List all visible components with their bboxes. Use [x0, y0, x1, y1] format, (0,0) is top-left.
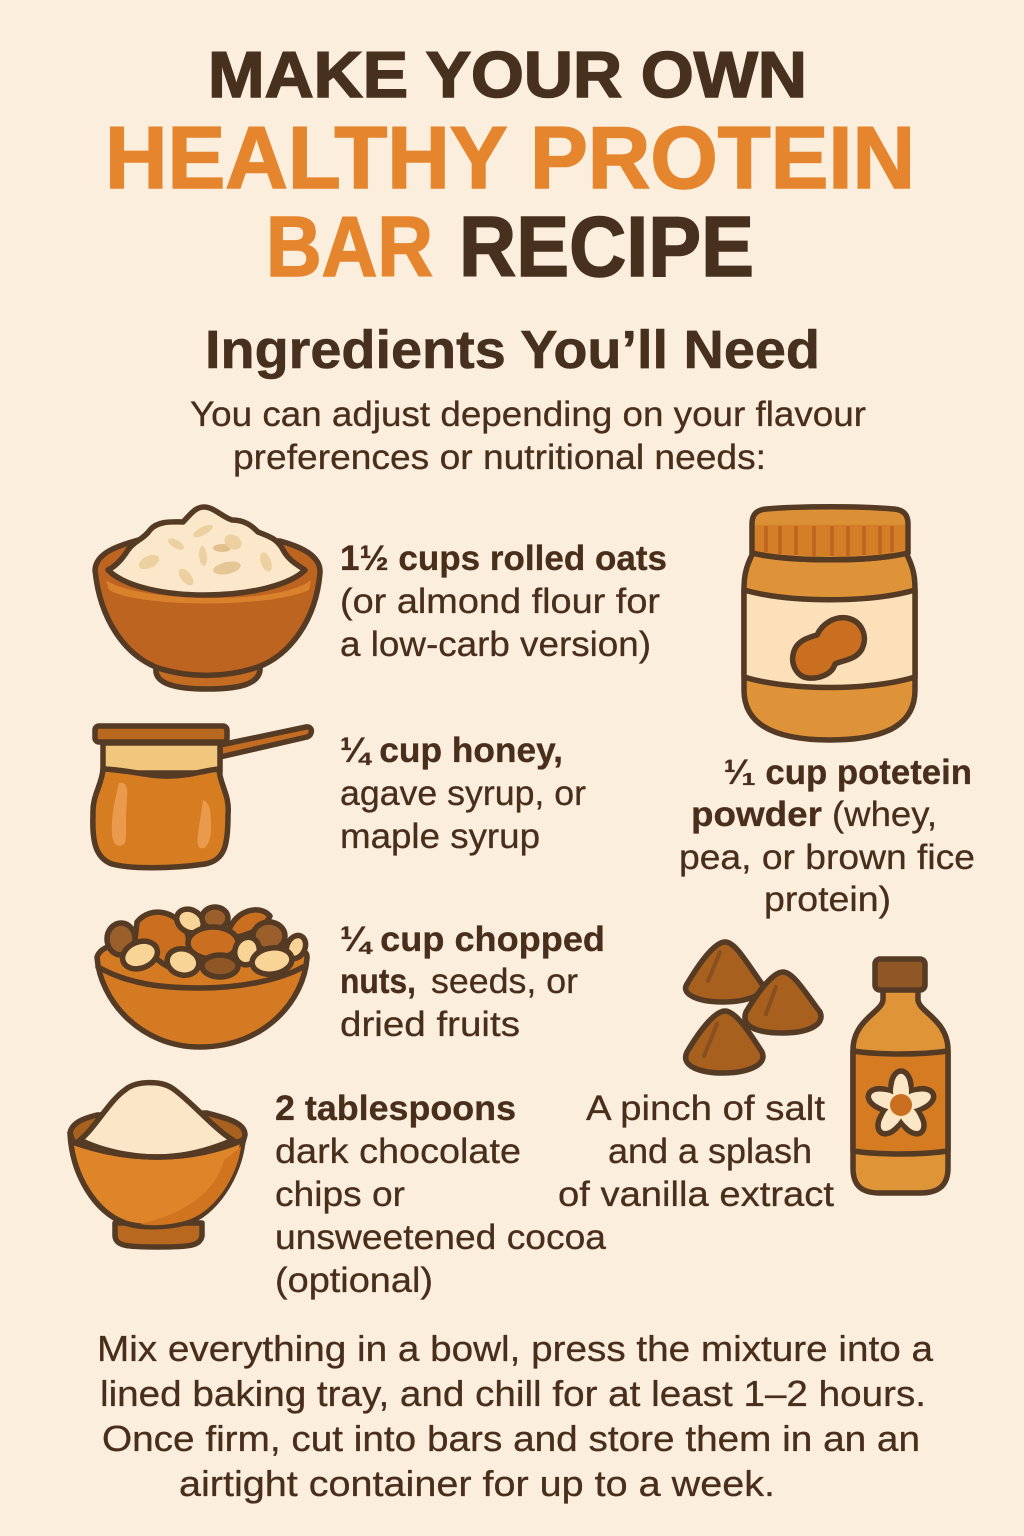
text: nuts: nuts, [340, 962, 416, 1001]
title: BAR [266, 200, 433, 295]
text: chocolate: dark chocolate [275, 1132, 521, 1171]
text: chocolate: (optional) [275, 1261, 433, 1300]
text: nuts: dried fruits [340, 1005, 520, 1044]
text: oats: a low-carb version) [340, 625, 651, 664]
title: RECIPE [459, 200, 754, 295]
icon: vanilla bottle [853, 959, 948, 1193]
text: nuts [340, 920, 605, 1044]
heading: ingredients: Ingredients You’ll Need [205, 320, 820, 380]
text: salt and vanilla: A pinch of salt [586, 1089, 825, 1128]
text: nuts: seeds, or [431, 962, 578, 1001]
text: oats: (or almond flour for [340, 582, 660, 621]
title [105, 38, 915, 295]
text: protein powder: (whey, [832, 795, 937, 834]
text: instructions [97, 1328, 934, 1504]
text: instructions: Mix everything in a bowl, press the mixture into a [97, 1328, 934, 1369]
text: chocolate: unsweetened cocoa [275, 1218, 607, 1257]
icon: peanut butter jar [744, 507, 915, 740]
text: honey [340, 731, 586, 856]
icon: bowl of oats [95, 507, 320, 689]
text: protein powder: protein) [764, 880, 891, 919]
text: protein powder [679, 753, 975, 919]
text: chocolate [275, 1089, 607, 1300]
title: MAKE YOUR OWN [208, 38, 807, 111]
text: oats: 1½ cups rolled oats [340, 539, 667, 578]
intro text: You can adjust depending on your flavour [190, 395, 866, 434]
icon: bowl of cocoa [70, 1083, 245, 1247]
text: nuts: ¼ cup chopped [340, 920, 605, 959]
icon: bowl of nuts [97, 904, 309, 1047]
text: chocolate: chips or [275, 1175, 405, 1214]
text: salt and vanilla [558, 1089, 834, 1214]
text: protein powder: ¹⁄₁ cup potetein [724, 753, 972, 792]
icon: honey pot [93, 726, 311, 868]
intro text: preferences or nutritional needs: [233, 438, 766, 477]
text: instructions: Once firm, cut into bars and store them in an an [102, 1418, 920, 1459]
text: protein powder: powder [691, 795, 822, 834]
text: instructions: airtight container for up to a week. [179, 1463, 775, 1504]
text: honey: maple syrup [340, 817, 540, 856]
text: protein powder: pea, or brown fice [679, 838, 975, 877]
text: instructions: lined baking tray, and chill for at least 1–2 hours. [100, 1373, 926, 1414]
text: oats [340, 539, 667, 664]
text: honey: agave syrup, or [340, 774, 586, 813]
text: chocolate: 2 tablespoons [275, 1089, 516, 1128]
icon: chocolate chips [686, 942, 821, 1073]
title: HEALTHY PROTEIN [105, 108, 915, 207]
intro text [190, 395, 866, 477]
text: salt and vanilla: and a splash [608, 1132, 812, 1171]
text: salt and vanilla: of vanilla extract [558, 1175, 834, 1214]
text: honey: ¼ cup honey, [340, 731, 563, 770]
